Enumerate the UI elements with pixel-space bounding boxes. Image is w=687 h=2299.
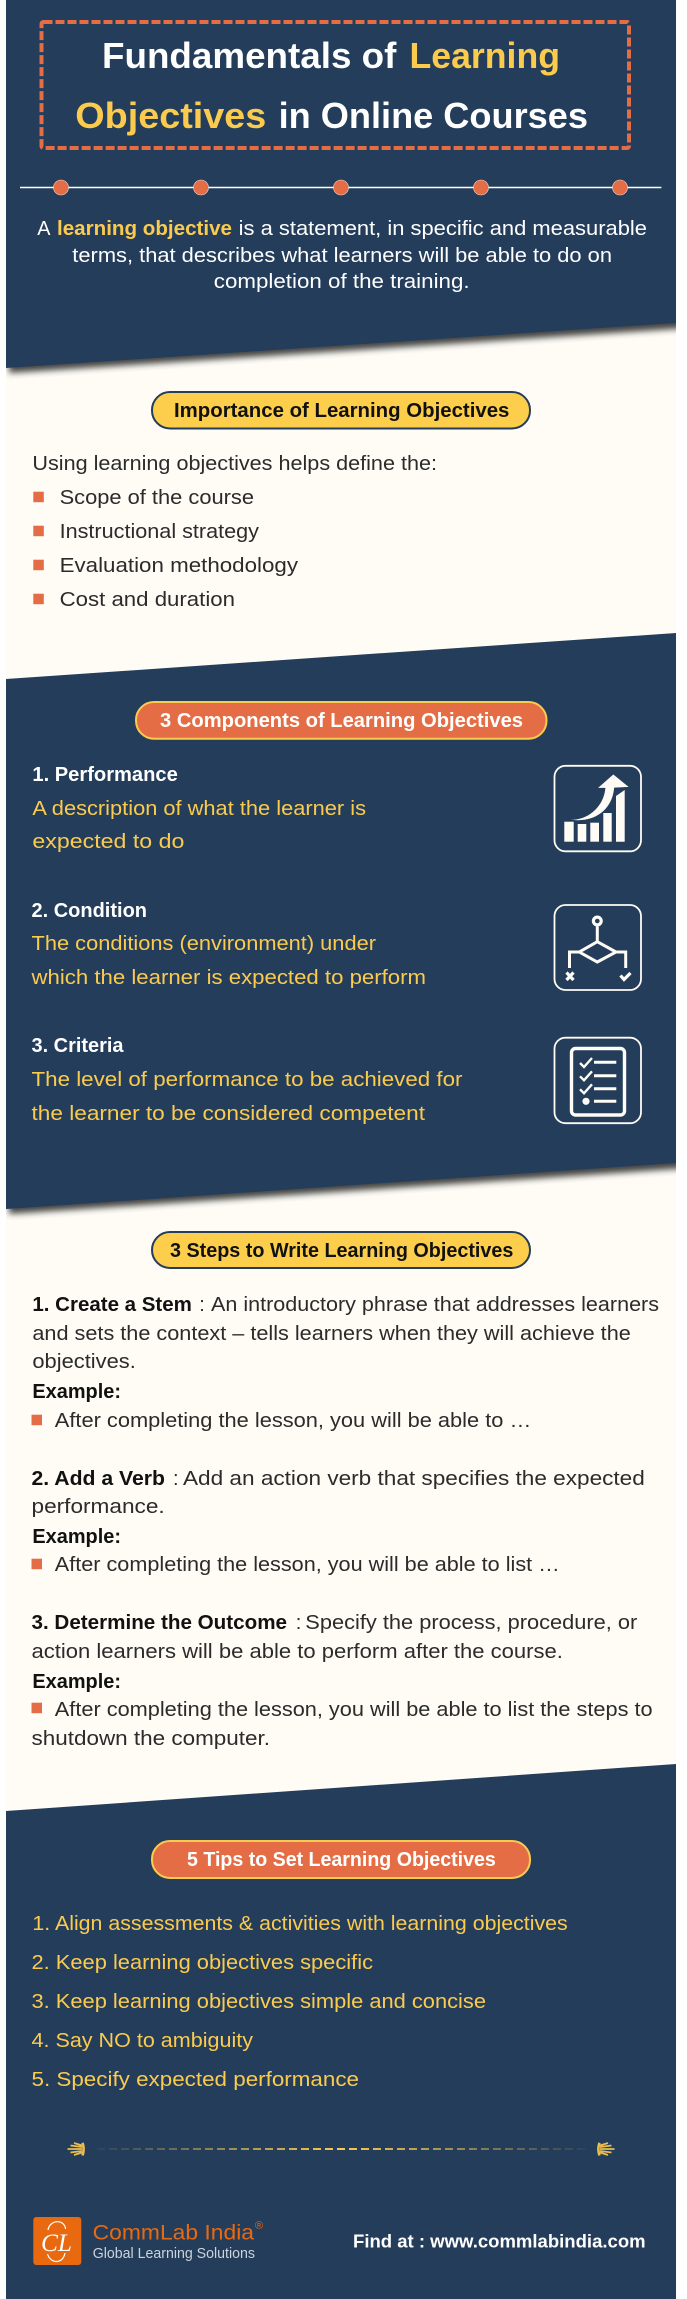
step 2: : — [173, 1468, 179, 1490]
logo: CommLab India: Global Learning Solutions — [93, 2246, 255, 2262]
bullet list: Instructional strategy — [60, 521, 259, 543]
step 3: Specify the process, procedure, or — [305, 1612, 638, 1634]
title — [75, 35, 588, 136]
logo: CommLab India: ® — [255, 2220, 263, 2232]
step 1: An introductory phrase that addresses learners — [211, 1294, 659, 1316]
ornamental dashed divider — [68, 2143, 614, 2156]
title frame — [42, 22, 629, 148]
logo: CommLab India: CommLab India — [93, 2222, 254, 2244]
step 3: Example: — [32, 1671, 121, 1693]
component: condition: which the learner is expected to perform — [30, 967, 426, 989]
step 3: action learners will be able to perform after the course. — [32, 1641, 563, 1663]
step 1: Example: — [32, 1381, 121, 1403]
icon: decision flowchart — [554, 905, 641, 990]
icon: checklist — [554, 1038, 641, 1123]
step 2 — [32, 1468, 645, 1576]
component: performance — [32, 764, 366, 853]
panel: steps — [32, 1232, 659, 1750]
intro text: completion of the training. — [214, 271, 470, 293]
panel: header — [6, 0, 687, 373]
title: Objectives — [75, 95, 266, 136]
icon: rising bar chart — [554, 766, 641, 851]
heading pill: components — [136, 702, 546, 739]
step 2: performance. — [32, 1496, 165, 1518]
heading pill: importance — [152, 392, 530, 428]
title: Learning — [410, 35, 560, 76]
step 3 — [32, 1612, 653, 1750]
step 3: : — [296, 1612, 301, 1634]
bullet list: Cost and duration — [60, 589, 235, 611]
component: condition: 2. Condition — [32, 900, 147, 922]
component: performance: expected to do — [32, 831, 184, 853]
intro text — [37, 218, 647, 293]
heading pill: components: 3 Components of Learning Objectives — [160, 710, 523, 732]
step 1 — [32, 1294, 659, 1432]
component: criteria — [32, 1035, 463, 1125]
component: criteria: the learner to be considered competent — [32, 1103, 425, 1125]
tips list — [32, 1913, 568, 2091]
intro text: terms, that describes what learners will be able to do on — [72, 245, 612, 267]
step 2: Example: — [32, 1526, 121, 1548]
step 1: After completing the lesson, you will be able to … — [55, 1410, 531, 1432]
footer link: Find at : www.commlabindia.com — [353, 2231, 646, 2252]
component: criteria: 3. Criteria — [32, 1035, 124, 1057]
step 3: 3. Determine the Outcome — [32, 1612, 287, 1634]
step 3: shutdown the computer. — [32, 1728, 270, 1750]
panel: tips and footer — [6, 1764, 676, 2299]
component: performance: A description of what the learner is — [32, 798, 366, 820]
heading pill: tips: 5 Tips to Set Learning Objectives — [187, 1849, 496, 1871]
step 1: 1. Create a Stem — [32, 1294, 192, 1316]
step 2: After completing the lesson, you will be able to list … — [55, 1554, 560, 1576]
intro text: learning objective — [57, 218, 232, 240]
tips list: 5. Specify expected performance — [32, 2069, 359, 2091]
tips list: 2. Keep learning objectives specific — [32, 1952, 373, 1974]
tips list: 1. Align assessments & activities with learning objectives — [32, 1913, 568, 1935]
component: performance: 1. Performance — [32, 764, 178, 786]
panel: components — [6, 633, 687, 1214]
logo: CommLab India — [33, 2217, 263, 2265]
title: in Online Courses — [279, 95, 588, 136]
bullet list — [33, 487, 298, 611]
step 2: 2. Add a Verb — [32, 1468, 165, 1490]
logo mark — [33, 2217, 81, 2265]
logo mark: CL — [41, 2230, 72, 2257]
heading pill: importance: Importance of Learning Objectives — [174, 400, 509, 422]
intro text: A — [37, 218, 51, 240]
heading pill: steps — [152, 1232, 530, 1268]
component: condition — [30, 900, 426, 989]
step 1: objectives. — [32, 1351, 136, 1373]
component: condition: The conditions (environment) under — [32, 933, 376, 955]
panel: importance — [32, 392, 530, 611]
heading pill: tips — [152, 1841, 530, 1878]
heading pill: steps: 3 Steps to Write Learning Objectives — [170, 1240, 513, 1262]
step 2: Add an action verb that specifies the expected — [183, 1468, 645, 1490]
bullet list: Scope of the course — [60, 487, 254, 509]
step 3: After completing the lesson, you will be able to list the steps to — [55, 1699, 653, 1721]
dotted timeline divider — [20, 180, 661, 195]
bullet list: Evaluation methodology — [60, 555, 298, 577]
tips list: 4. Say NO to ambiguity — [32, 2030, 253, 2052]
title: Fundamentals of — [102, 35, 397, 76]
intro text: is a statement, in specific and measurable — [239, 218, 647, 240]
intro sentence: Using learning objectives helps define the: — [32, 453, 437, 475]
step 1: : — [199, 1294, 205, 1316]
component: criteria: The level of performance to be achieved for — [32, 1069, 463, 1091]
step 1: and sets the context – tells learners when they will achieve the — [32, 1323, 631, 1345]
tips list: 3. Keep learning objectives simple and concise — [32, 1991, 486, 2013]
